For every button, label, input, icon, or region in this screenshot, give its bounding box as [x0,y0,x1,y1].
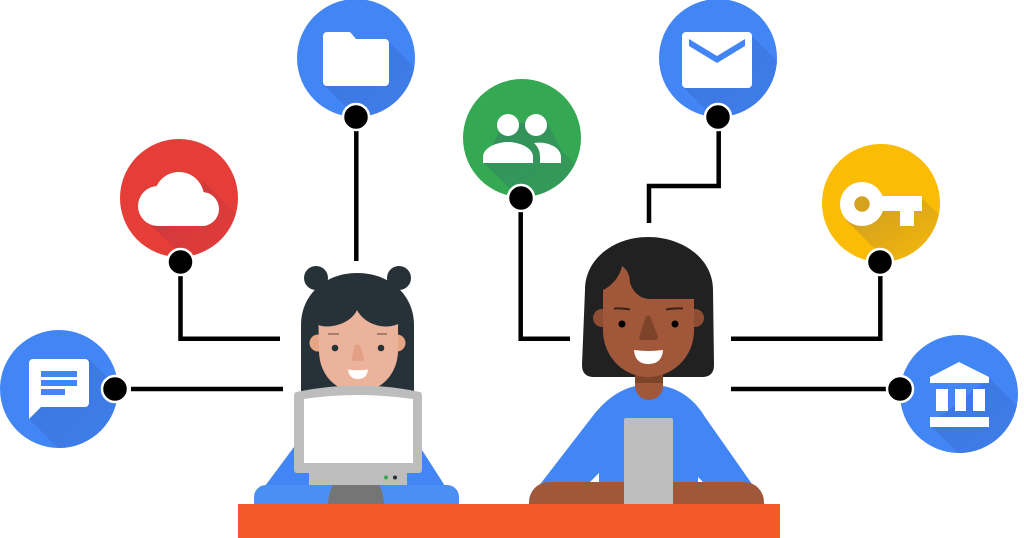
mouth [634,350,663,364]
eyebrows [614,308,683,310]
icon: bank badge [900,335,1018,453]
monitor base [309,470,407,485]
sleeve gaps [590,473,703,482]
neck shadow [635,374,663,383]
icon: folder badge [297,0,415,116]
icon: cloud badge [120,139,238,256]
face [603,266,694,377]
hair [582,237,714,377]
hair [301,266,414,392]
face [318,310,398,392]
icon: mail badge [659,0,777,116]
monitor stand [328,485,384,505]
monitor screen [304,395,413,463]
icon: chat bubble badge [0,330,116,448]
status lights [384,476,397,480]
eyebrows [328,333,387,335]
arms [254,485,459,505]
nose [639,316,658,340]
person: woman with phone [529,237,764,505]
person: girl at computer [254,266,459,505]
ears [310,334,406,352]
nose [352,344,364,361]
table [238,504,780,538]
icon: people group badge [463,79,581,196]
icon: key badge [822,144,940,260]
ears [593,309,704,327]
phone [624,418,673,505]
eyes [332,345,384,351]
torso [538,386,752,487]
connector dots [102,104,913,402]
torso [265,447,445,486]
neck [635,372,663,400]
arms [529,482,764,505]
eyes [618,320,678,328]
mouth [348,370,368,379]
monitor frame [294,386,422,473]
connector lines [131,117,900,389]
